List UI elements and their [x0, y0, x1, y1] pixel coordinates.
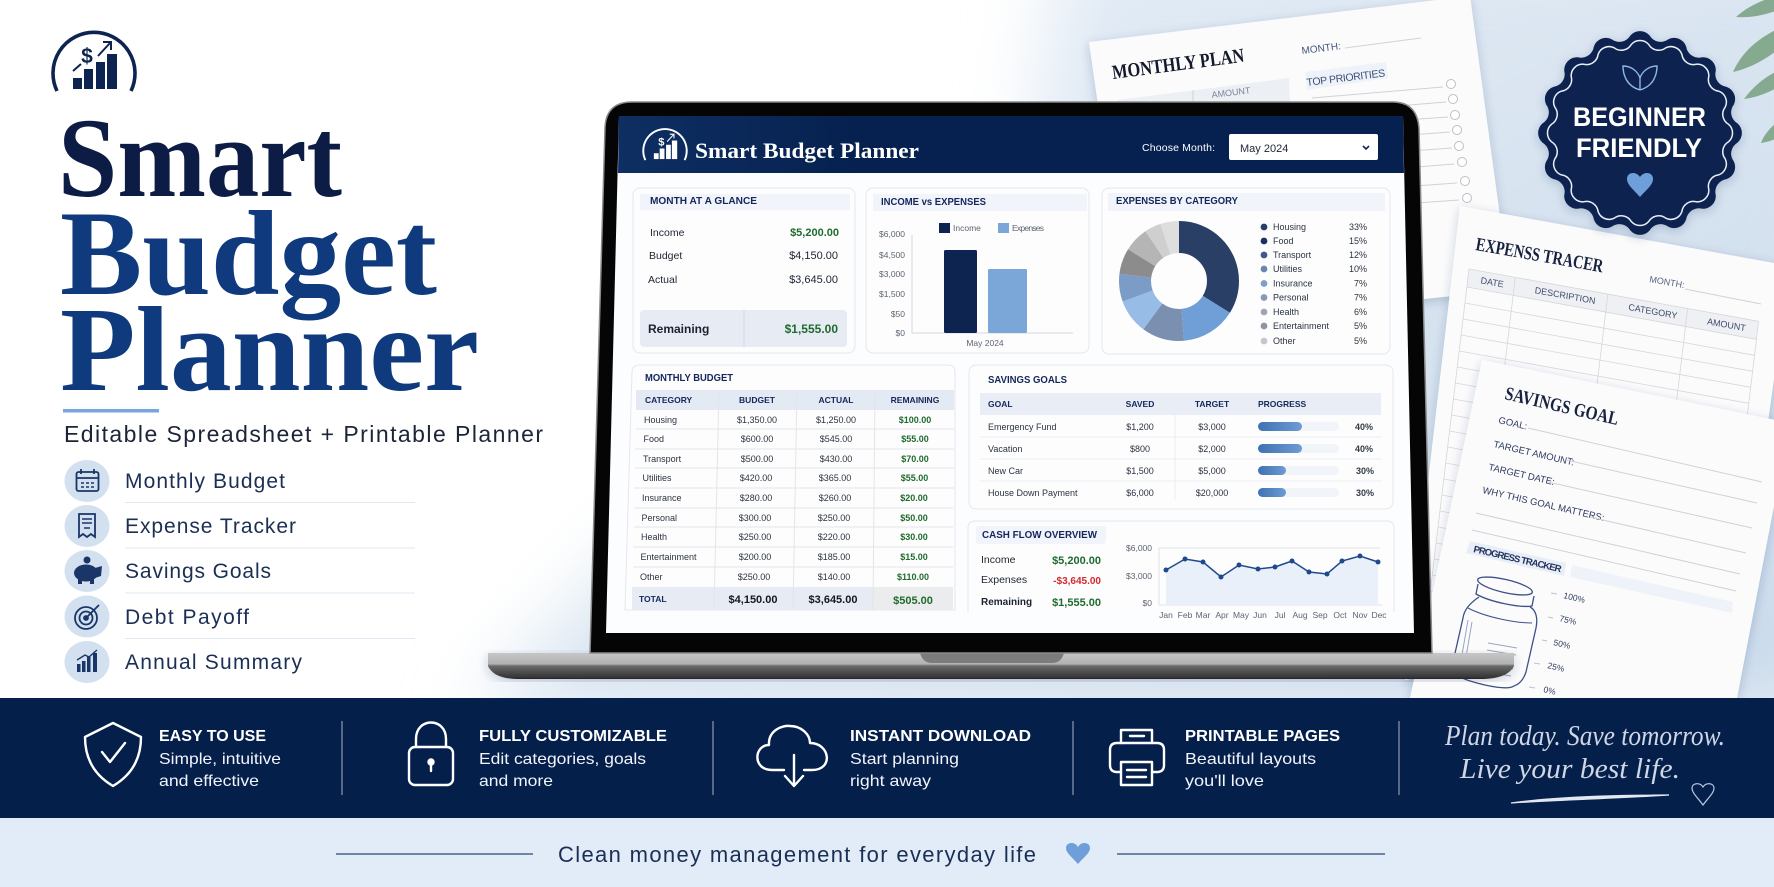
goals table: SAVED: [1126, 399, 1154, 409]
accent rule: [63, 409, 159, 412]
donut legend: 5%: [1354, 336, 1367, 346]
progress bars: [1258, 422, 1374, 498]
feature: instant download: [850, 728, 1031, 790]
laptop bezel: [590, 102, 1432, 653]
remaining box: Remaining: [648, 322, 709, 336]
footer strip: Clean money management for everyday life: [558, 842, 1036, 867]
panel: monthly budget: [625, 365, 955, 610]
paper: savings goal: SAVINGS GOAL: [1503, 383, 1621, 430]
donut legend: 6%: [1354, 307, 1367, 317]
paper: monthly plan: MONTHLY PLAN: [1111, 45, 1246, 84]
goals table: $2,000: [1198, 444, 1226, 454]
line chart: Sep: [1312, 610, 1328, 620]
line chart: May: [1233, 610, 1250, 620]
panel: cash flow overview: Expenses: [981, 574, 1027, 586]
panel: month at a glance: [633, 188, 855, 353]
paper: savings goal: 50%: [1553, 637, 1572, 651]
donut legend: 15%: [1349, 236, 1367, 246]
progress bars: 40%: [1355, 444, 1373, 454]
budget table: $260.00: [819, 493, 851, 503]
script tagline: Live your best life.: [1459, 754, 1680, 785]
budget table: $1,350.00: [737, 415, 777, 425]
badge: beginner friendly: [1538, 31, 1742, 235]
panel: month at a glance: MONTH AT A GLANCE: [650, 195, 757, 207]
badge: beginner friendly: FRIENDLY: [1576, 133, 1702, 163]
list labels: Monthly Budget: [125, 470, 285, 493]
paper: savings goal: PROGRESS TRACKER: [1472, 544, 1563, 575]
budget table: Transport: [643, 454, 682, 464]
icon: printer: [1110, 730, 1164, 785]
goals table: Vacation: [988, 444, 1022, 454]
budget table: Insurance: [642, 493, 682, 503]
title: Budget: [60, 187, 437, 321]
progress bars: 40%: [1355, 422, 1373, 432]
list labels: Expense Tracker: [125, 515, 296, 538]
feature: fully customizable: FULLY CUSTOMIZABLE: [479, 728, 667, 745]
list labels: Annual Summary: [125, 651, 302, 674]
dashboard header: Smart Budget Planner: [695, 138, 919, 163]
logo: chart in arc: [53, 32, 135, 91]
budget table: $200.00: [739, 552, 771, 562]
list labels: Savings Goals: [125, 560, 271, 583]
bar chart: $50: [891, 309, 905, 319]
panel: cash flow overview: $5,200.00: [1052, 555, 1101, 567]
budget table: $1,250.00: [816, 415, 856, 425]
paper: expense tracker: CATEGORY: [1628, 302, 1678, 321]
goals table: Emergency Fund: [988, 422, 1057, 432]
dashboard header: [618, 116, 1404, 173]
line chart: Mar: [1196, 610, 1210, 620]
budget table: Other: [640, 572, 663, 582]
donut legend: Utilities: [1273, 264, 1303, 274]
feature: printable pages: you'll love: [1185, 773, 1264, 790]
budget table: $250.00: [818, 513, 850, 523]
line chart: Jul: [1275, 610, 1286, 620]
panel: month at a glance: $4,150.00: [789, 250, 838, 262]
feature: easy to use: EASY TO USE: [159, 728, 266, 745]
leaves: [1733, 0, 1774, 143]
feature: fully customizable: Edit categories, goals: [479, 751, 646, 768]
donut legend: 7%: [1354, 292, 1367, 302]
budget table: ACTUAL: [819, 395, 853, 405]
bar chart: May 2024: [966, 338, 1004, 348]
paper: monthly plan: MONTH:: [1301, 41, 1342, 57]
progress bars: 30%: [1356, 466, 1374, 476]
panel: income vs expenses: INCOME vs EXPENSES: [881, 196, 986, 208]
bar chart: $0: [896, 328, 905, 338]
feature: easy to use: Simple, intuitive: [159, 751, 281, 768]
budget table: [632, 390, 954, 610]
donut legend: Health: [1273, 307, 1299, 317]
donut legend: [1261, 222, 1367, 346]
budget table: $280.00: [740, 493, 772, 503]
paper: expense tracker: AMOUNT: [1707, 316, 1747, 333]
donut legend: Transport: [1273, 250, 1312, 260]
icon: padlock: [409, 722, 453, 785]
goals table: $1,200: [1126, 422, 1154, 432]
footer strip: [0, 818, 1774, 887]
budget table: $300.00: [739, 513, 771, 523]
goals table: PROGRESS: [1258, 399, 1307, 409]
goals table: New Car: [988, 466, 1023, 476]
goals table: TARGET: [1195, 399, 1230, 409]
panel: monthly budget: MONTHLY BUDGET: [645, 372, 734, 384]
feature band: [0, 698, 1774, 818]
panel: month at a glance: $5,200.00: [790, 227, 839, 239]
feature: instant download: Start planning: [850, 751, 959, 768]
budget table: $3,645.00: [809, 594, 857, 606]
paper: savings goal: GOAL:: [1497, 415, 1528, 432]
paper: monthly plan: [1089, 0, 1510, 330]
panel: savings goals: SAVINGS GOALS: [988, 374, 1067, 386]
budget table: BUDGET: [739, 395, 776, 405]
icon: heart: [1066, 843, 1090, 864]
panel: month at a glance: Actual: [648, 274, 677, 286]
donut legend: Food: [1273, 236, 1294, 246]
panel: cash flow overview: CASH FLOW OVERVIEW: [982, 529, 1097, 541]
panel: cash flow overview: [968, 521, 1394, 620]
line chart: Apr: [1215, 610, 1229, 620]
paper: savings goal: 75%: [1559, 613, 1578, 627]
paper: expense tracker: DATE: [1480, 275, 1504, 289]
goals table: $5,000: [1198, 466, 1226, 476]
progress bars: 30%: [1356, 488, 1374, 498]
budget table: $55.00: [901, 434, 929, 444]
feature: printable pages: [1185, 728, 1340, 790]
month select: [1229, 134, 1378, 160]
donut chart: [1135, 237, 1223, 325]
paper: savings goal: WHY THIS GOAL MATTERS:: [1481, 485, 1605, 524]
chart legend: [939, 223, 1044, 233]
paper: savings goal: 25%: [1547, 660, 1566, 674]
budget table: CATEGORY: [645, 395, 693, 405]
budget table: $250.00: [739, 532, 771, 542]
budget table: $20.00: [900, 493, 928, 503]
subtitle: Editable Spreadsheet + Printable Planner: [64, 421, 543, 447]
goals table: $800: [1130, 444, 1150, 454]
laptop base: [488, 653, 1514, 679]
donut legend: 5%: [1354, 321, 1367, 331]
title: Planner: [60, 283, 479, 417]
line chart: Dec: [1371, 610, 1387, 620]
budget table: $70.00: [901, 454, 929, 464]
feature: easy to use: and effective: [159, 773, 259, 790]
line chart: $6,000: [1126, 543, 1152, 553]
donut legend: Personal: [1273, 292, 1309, 302]
feature: printable pages: PRINTABLE PAGES: [1185, 728, 1340, 745]
bar chart: $4,500: [879, 250, 905, 260]
paper: savings goal: TARGET AMOUNT:: [1492, 439, 1575, 468]
laptop: [488, 102, 1514, 679]
list labels: Debt Payoff: [125, 606, 249, 629]
budget table: $4,150.00: [729, 594, 777, 606]
chart legend: Income: [953, 223, 981, 233]
budget table: $100.00: [899, 415, 931, 425]
goals table: GOAL: [988, 399, 1013, 409]
panel: cash flow overview: $1,555.00: [1052, 597, 1101, 609]
goals table: $6,000: [1126, 488, 1154, 498]
line chart: Jun: [1253, 610, 1267, 620]
month select: May 2024: [1240, 143, 1288, 155]
budget table: TOTAL: [639, 594, 667, 604]
icon: cloud download: [757, 726, 827, 786]
panel: expenses by category: [1102, 188, 1390, 354]
panel: month at a glance: Income: [650, 227, 685, 239]
script tagline: [1444, 721, 1725, 805]
remaining box: $1,555.00: [785, 322, 838, 336]
feature: easy to use: [159, 728, 281, 790]
budget table: $15.00: [900, 552, 928, 562]
panel: cash flow overview: Income: [981, 554, 1016, 566]
line chart: $3,000: [1126, 571, 1152, 581]
paper: savings goal: 0%: [1543, 684, 1557, 697]
paper: expense tracker: [1405, 206, 1774, 680]
goals table: $20,000: [1196, 488, 1228, 498]
budget table: $430.00: [820, 454, 852, 464]
line chart: [1126, 543, 1387, 620]
budget table: Personal: [642, 513, 677, 523]
donut legend: 12%: [1349, 250, 1367, 260]
feature list: [64, 460, 415, 683]
donut legend: 33%: [1349, 222, 1367, 232]
goals table: $1,500: [1126, 466, 1154, 476]
paper: expense tracker: DESCRIPTION: [1534, 285, 1596, 306]
budget table: $420.00: [740, 473, 772, 483]
panel: cash flow overview: -$3,645.00: [1053, 576, 1101, 587]
budget table: $185.00: [818, 552, 850, 562]
line chart: $0: [1143, 598, 1152, 608]
title: Smart: [58, 96, 342, 221]
paper: monthly plan: AMOUNT: [1211, 85, 1251, 100]
budget table: Housing: [644, 415, 677, 425]
budget table: $140.00: [818, 572, 850, 582]
paper: expense tracker: MONTH:: [1649, 274, 1685, 290]
goals table: [980, 393, 1381, 500]
screen: [606, 116, 1414, 633]
budget table: Entertainment: [640, 552, 697, 562]
budget table: $30.00: [900, 532, 928, 542]
remaining box: [640, 310, 847, 347]
panel: expenses by category: EXPENSES BY CATEGORY: [1116, 195, 1238, 207]
budget table: $50.00: [900, 513, 928, 523]
budget table: Food: [644, 434, 664, 444]
dashboard header: Choose Month:: [1142, 142, 1215, 154]
budget table: $110.00: [897, 572, 929, 582]
line chart: Aug: [1292, 610, 1308, 620]
line chart: Jan: [1159, 610, 1173, 620]
icon: shield: [85, 723, 141, 786]
line chart: Oct: [1333, 610, 1347, 620]
donut legend: Insurance: [1273, 278, 1313, 288]
panel: income vs expenses: [866, 188, 1089, 353]
budget table: $250.00: [738, 572, 770, 582]
budget table: $55.00: [901, 473, 928, 483]
bar chart: $3,000: [879, 269, 905, 279]
budget table: $505.00: [893, 595, 933, 607]
budget table: $545.00: [820, 434, 852, 444]
feature: instant download: INSTANT DOWNLOAD: [850, 728, 1031, 745]
feature: printable pages: Beautiful layouts: [1185, 751, 1316, 768]
budget table: REMAINING: [891, 395, 940, 405]
goals table: $3,000: [1198, 422, 1226, 432]
paper: savings goal: [1410, 360, 1774, 698]
donut legend: 7%: [1354, 278, 1367, 288]
budget table: $365.00: [819, 473, 851, 483]
panel: month at a glance: Budget: [649, 250, 682, 262]
list labels: [125, 470, 302, 674]
donut legend: Housing: [1273, 222, 1306, 232]
paper: savings goal: 100%: [1563, 590, 1586, 605]
script tagline: Plan today. Save tomorrow.: [1444, 721, 1725, 752]
bar chart: [879, 229, 1073, 348]
badge: beginner friendly: BEGINNER: [1573, 102, 1706, 132]
feature: fully customizable: [479, 728, 667, 790]
budget table: $220.00: [818, 532, 850, 542]
budget table: $500.00: [741, 454, 773, 464]
panel: month at a glance: $3,645.00: [789, 274, 838, 286]
line chart: Feb: [1178, 610, 1193, 620]
icon: target: [75, 605, 99, 629]
icon: mason jar: [1453, 573, 1537, 688]
header logo: $: [658, 136, 665, 148]
panel: savings goals: [969, 365, 1393, 509]
feature: fully customizable: and more: [479, 773, 553, 790]
header logo: [643, 129, 687, 160]
icon: calendar: [76, 469, 98, 491]
icon: piggy bank: [74, 556, 102, 584]
panel: cash flow overview: Remaining: [981, 597, 1032, 608]
budget table: Health: [641, 532, 667, 542]
paper: expense tracker: EXPENSS TRACER: [1474, 234, 1605, 277]
chart legend: Expenses: [1012, 223, 1044, 233]
budget table: $600.00: [741, 434, 773, 444]
bar chart: $1,500: [879, 289, 905, 299]
paper: monthly plan: TOP PRIORITIES: [1306, 67, 1386, 89]
logo: chart in arc: $: [81, 45, 93, 68]
icon: annual chart: [77, 650, 97, 672]
line chart: Nov: [1352, 610, 1368, 620]
goals table: House Down Payment: [988, 488, 1078, 498]
feature: instant download: right away: [850, 773, 931, 790]
paper: savings goal: TARGET DATE:: [1487, 462, 1556, 488]
title: [58, 96, 479, 417]
donut legend: Other: [1273, 336, 1296, 346]
bar chart: $6,000: [879, 229, 905, 239]
donut legend: Entertainment: [1273, 321, 1330, 331]
donut legend: 10%: [1349, 264, 1367, 274]
budget table: Utilities: [642, 473, 672, 483]
icon: receipt: [79, 514, 95, 537]
